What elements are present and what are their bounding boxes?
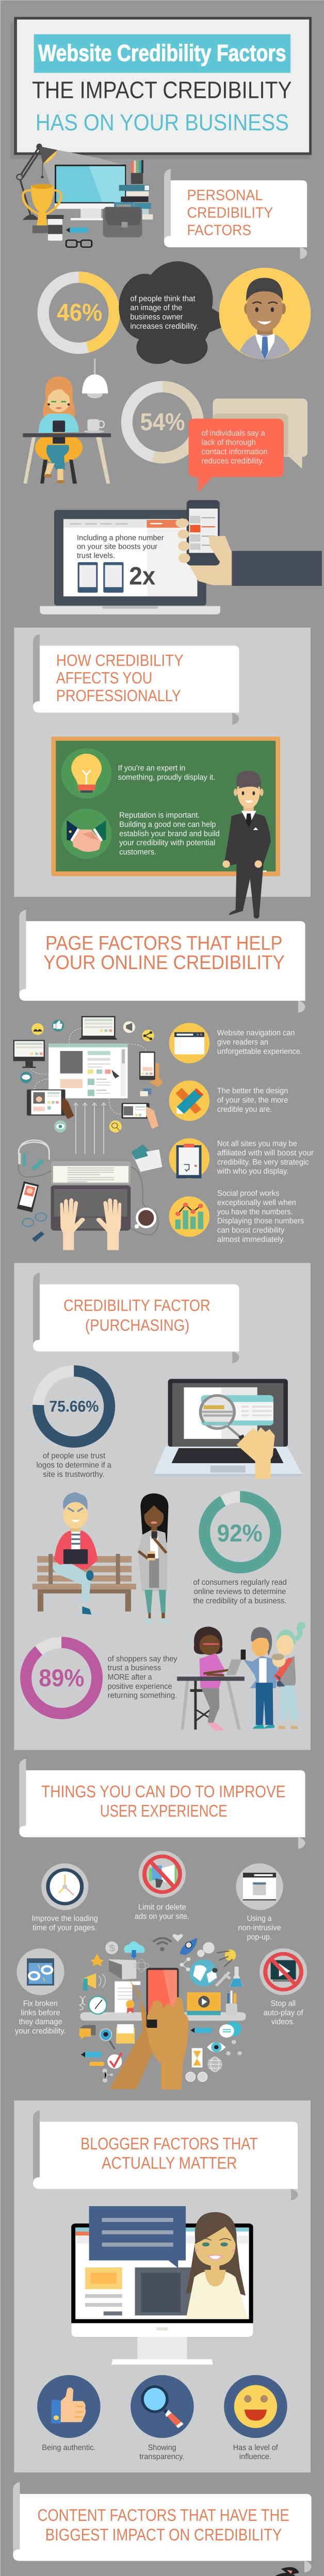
notebook top xyxy=(132,1144,152,1154)
woman with tablet at table xyxy=(23,377,111,484)
caption: authentic: Being authentic. xyxy=(42,2443,95,2452)
caption: trust logos xyxy=(36,1451,111,1479)
woman in pink xyxy=(194,1626,242,1731)
caption: influence: influence. xyxy=(239,2452,271,2461)
tip: design: The better the design xyxy=(217,1087,288,1095)
icons ring: $ xyxy=(109,1943,115,1954)
office scene: man at desk and colleague xyxy=(162,2567,300,2576)
illustration: devices and website xyxy=(13,1016,163,1154)
tip: social proof: almost immediately. xyxy=(217,1235,285,1244)
heading banner: PROFESSIONALLY xyxy=(56,686,181,705)
icon: thumbs up xyxy=(37,2375,101,2438)
heading banner xyxy=(33,1273,239,1363)
icon: broken link xyxy=(17,1948,64,1995)
speech bubble: contact information: of individuals say a xyxy=(201,429,265,437)
captions upper: broken links and autoplay: Stop all xyxy=(271,1999,296,2008)
icons around the hand xyxy=(79,2022,242,2082)
magnifier xyxy=(200,1396,247,1447)
speech bubble: business owner image: business owner xyxy=(130,312,183,321)
heading banner: improve user experience: USER EXPERIENCE xyxy=(100,1802,228,1820)
caption: online reviews: of consumers regularly read xyxy=(193,1578,287,1587)
caption: trust logos: logos to determine if a xyxy=(36,1461,111,1469)
heading banner: personal credibility factors: CREDIBILITY xyxy=(187,204,273,221)
tip: affiliations, first lines xyxy=(217,1139,314,1157)
website window xyxy=(48,1044,128,1098)
two phones icon xyxy=(78,562,123,592)
donut: 46 percent xyxy=(43,277,115,348)
caption: online reviews xyxy=(193,1578,287,1605)
tray xyxy=(80,2012,246,2021)
donut: 75.66 percent: 75.66% xyxy=(49,1398,99,1415)
tip: reputation: your credibility with potential xyxy=(119,838,215,847)
heading banner: BLOGGER FACTORS THAT xyxy=(80,2134,258,2153)
coffee cup xyxy=(47,215,63,241)
tip: social proof: exceptionally well when xyxy=(217,1198,296,1207)
caption: returning something: of shoppers say they xyxy=(108,1654,177,1663)
caption: pop-up: pop-up. xyxy=(247,1933,272,1941)
caption: limit ads xyxy=(135,1903,189,1921)
tip: design xyxy=(217,1087,288,1113)
blue glasses xyxy=(23,1213,46,1227)
heading banner: personal credibility factors xyxy=(164,169,307,259)
icon: clipboard strategy xyxy=(169,1138,209,1179)
chalkboard xyxy=(51,737,280,876)
icon: ruler and pencil xyxy=(169,1080,209,1121)
heading banner: ACTUALLY MATTER xyxy=(102,2154,237,2172)
caption: influence xyxy=(233,2443,278,2461)
pencil cup xyxy=(131,160,143,184)
woman standing with phone xyxy=(138,1494,172,1624)
tip: expert xyxy=(118,764,215,782)
group: woman with laptop, man and mother with baby xyxy=(177,1622,305,1731)
caption: loading time: time of your pages. xyxy=(33,1923,97,1932)
hand holding phone xyxy=(175,500,322,586)
hands typing xyxy=(60,1198,121,1250)
speech bubble: business owner image: increases credibility. xyxy=(130,321,198,330)
icon: browser window xyxy=(169,1023,209,1063)
icon: popup window xyxy=(236,1863,283,1910)
panel: blogger factors xyxy=(14,2100,311,2472)
blogger woman xyxy=(186,2212,248,2319)
headphones xyxy=(18,1142,49,1171)
icon: magnifying glass xyxy=(131,2375,194,2438)
captions lower: broken links and autoplay: your credibility. xyxy=(15,2026,66,2035)
caption: limit ads: Limit or delete xyxy=(138,1903,186,1911)
donut: 92 percent: 92% xyxy=(217,1520,263,1547)
headphones xyxy=(19,1140,49,1154)
caption: returning something: trust a business xyxy=(108,1664,161,1672)
heading banner: HOW CREDIBILITY xyxy=(56,651,184,669)
tip: navigation: unforgettable experience. xyxy=(217,1047,302,1056)
title panel xyxy=(10,17,312,159)
caption: trust logos: site is trustworthy. xyxy=(43,1470,105,1479)
caption: pop-up xyxy=(238,1914,281,1941)
top-down laptop and accessories xyxy=(17,1142,162,1250)
laptop with phone number stat: Including a phone number xyxy=(77,533,164,542)
captions upper: broken links and autoplay xyxy=(21,1999,303,2017)
tip: social proof: can boost credibility xyxy=(217,1226,285,1234)
tip: social proof: Social proof works xyxy=(217,1189,279,1198)
donut: 75.66 percent xyxy=(38,1371,109,1442)
tip: reputation: establish your brand and build xyxy=(119,829,220,838)
speech bubble: business owner image: an image of the xyxy=(130,303,182,312)
pendant lamp xyxy=(82,359,108,398)
icon: no autoplay video xyxy=(260,1948,307,1995)
speech bubble: contact information xyxy=(189,399,307,493)
heading banner: AFFECTS YOU xyxy=(56,668,152,687)
laptop with phone number stat: on your site boosts your xyxy=(77,542,157,551)
donut: 89 percent: 89% xyxy=(39,1665,84,1692)
briefcase xyxy=(103,204,142,238)
caption: returning something: MORE after a xyxy=(108,1672,152,1682)
caption: limit ads: ads on your site. xyxy=(135,1912,189,1921)
icon: bar chart xyxy=(169,1196,209,1237)
captions upper: broken links and autoplay: Fix broken xyxy=(23,1999,58,2008)
heading banner: improve user experience xyxy=(19,1759,305,1849)
coffee cup on table xyxy=(84,419,104,433)
captions upper: broken links and autoplay: links before xyxy=(21,2008,60,2017)
monitor xyxy=(55,165,126,220)
caption: returning something: positive experience xyxy=(108,1682,172,1690)
mother with baby xyxy=(272,1622,305,1729)
donut: 54 percent xyxy=(127,386,198,457)
heading banner: personal credibility factors: FACTORS xyxy=(187,222,251,239)
stack of books xyxy=(119,185,153,219)
tip: navigation xyxy=(217,1028,302,1056)
captions lower: broken links and autoplay: they damage xyxy=(19,2017,62,2026)
tip: affiliations, first lines: Not all sites you may be xyxy=(217,1139,297,1148)
speech bubble: contact information: lack of thorough xyxy=(201,438,256,447)
heading banner xyxy=(33,2110,298,2200)
desk lamp xyxy=(17,144,57,220)
donut: 46 percent: 46% xyxy=(57,299,102,326)
icons ring xyxy=(79,1934,244,2015)
icon: no ads xyxy=(139,1851,186,1897)
panel: credibility factor purchasing xyxy=(14,1263,311,1750)
laptop with magnifier and hand xyxy=(154,1379,302,1479)
tip: reputation: customers. xyxy=(119,848,156,856)
monitor with blogger xyxy=(71,2206,253,2365)
tip: affiliations, last lines: credibility. Be very strategic xyxy=(217,1158,309,1166)
small round icons xyxy=(20,1020,154,1132)
laptop xyxy=(79,1016,118,1040)
caption: transparency: Showing xyxy=(148,2443,176,2452)
icon: smiley xyxy=(224,2375,287,2438)
captions lower: broken links and autoplay: videos. xyxy=(271,2017,295,2026)
tip: expert: something, proudly display it. xyxy=(118,773,215,782)
hands holding phone xyxy=(109,1968,188,2090)
stool xyxy=(181,1681,241,1730)
tip: social proof: you have the numbers. xyxy=(217,1207,293,1216)
glasses xyxy=(66,240,92,247)
caption: online reviews: online reviews to determine xyxy=(194,1587,286,1596)
caption: transparency xyxy=(139,2443,184,2461)
laptop with phone number stat: 2x xyxy=(129,562,155,590)
coffee cup top view xyxy=(135,1208,156,1228)
donut: 92 percent xyxy=(204,1497,276,1568)
heading banner: page factors xyxy=(19,910,305,1013)
illustration: phone with app icons xyxy=(79,1934,246,2021)
caption: transparency: transparency. xyxy=(139,2452,184,2461)
tip: affiliations, last lines xyxy=(217,1158,309,1176)
tip: design: credible you are. xyxy=(217,1105,272,1113)
tip: social proof: Displaying those numbers xyxy=(217,1216,304,1225)
tablet in dark hand xyxy=(27,1090,74,1119)
usb stick xyxy=(32,1231,44,1242)
caption: trust logos: of people use trust xyxy=(43,1451,105,1460)
speech bubble xyxy=(89,2206,186,2268)
icon: light bulb xyxy=(61,748,111,799)
laptop base xyxy=(154,1447,302,1477)
caption: influence: Has a level of xyxy=(233,2443,278,2452)
laptop with phone number stat: trust levels. xyxy=(77,551,115,560)
phone on desk xyxy=(17,1181,39,1212)
tip: navigation: give readers an xyxy=(217,1038,268,1046)
tip: reputation: Building a good one can help xyxy=(119,820,216,829)
pencil xyxy=(66,227,88,233)
section: header and personal credibility xyxy=(10,17,312,259)
caption: returning something xyxy=(108,1654,177,1700)
heading banner: CREDIBILITY FACTOR xyxy=(63,1296,210,1314)
small tablet in hand xyxy=(121,1103,158,1129)
heading banner: content factors xyxy=(13,2482,312,2572)
captions lower: broken links and autoplay xyxy=(15,2017,295,2035)
speech bubble: business owner image xyxy=(119,261,235,364)
keyboard xyxy=(51,1185,131,1231)
man on bench with tablet xyxy=(33,1492,136,1615)
caption: pop-up: Using a xyxy=(247,1914,272,1923)
tip: design: of your site, the more xyxy=(217,1095,288,1105)
speech bubble: business owner image: of people think that xyxy=(130,294,195,303)
icon: clock xyxy=(41,1863,88,1910)
trophy xyxy=(23,184,61,233)
icon: handshake xyxy=(61,808,111,859)
donut: 54 percent: 54% xyxy=(140,408,185,435)
panel: how credibility affects you professionally xyxy=(14,628,311,919)
speech bubble: contact information: reduces credibility. xyxy=(201,456,264,465)
donut: 89 percent xyxy=(26,1642,97,1714)
laptop with phone number stat xyxy=(40,510,220,614)
tip: affiliations, first lines: affiliated with will boost your xyxy=(217,1148,314,1157)
businessman portrait xyxy=(219,268,311,359)
caption: loading time: Improve the loading xyxy=(32,1914,98,1923)
tip: affiliations, last lines: with who you display. xyxy=(217,1167,288,1176)
woman with clipboard xyxy=(252,2567,300,2576)
caption: pop-up: non-intrusive xyxy=(238,1923,281,1932)
tip: navigation: Website navigation can xyxy=(217,1028,295,1037)
captions upper: broken links and autoplay: auto-play of xyxy=(264,2008,303,2017)
man with phone xyxy=(241,1627,278,1728)
tip: expert: If you're an expert in xyxy=(118,764,185,772)
tip: social proof xyxy=(217,1189,304,1244)
heading banner: (PURCHASING) xyxy=(85,1316,189,1334)
caption: returning something: returning something. xyxy=(108,1691,177,1700)
heading banner xyxy=(33,634,239,724)
caption: loading time xyxy=(32,1914,98,1932)
presenter in suit xyxy=(222,771,271,919)
tip: reputation xyxy=(119,811,220,856)
desk illustration xyxy=(17,144,153,247)
desktop monitor xyxy=(13,1040,45,1068)
arrows xyxy=(74,1103,106,1154)
title banner xyxy=(34,34,290,73)
tip: reputation: Reputation is important. xyxy=(119,811,200,820)
phone in hand xyxy=(139,1052,163,1087)
caption: online reviews: the credibility of a business. xyxy=(193,1596,286,1605)
heading banner: personal credibility factors: PERSONAL xyxy=(187,187,263,204)
notebook xyxy=(132,1148,162,1172)
speech bubble: contact information: contact information xyxy=(201,447,268,456)
